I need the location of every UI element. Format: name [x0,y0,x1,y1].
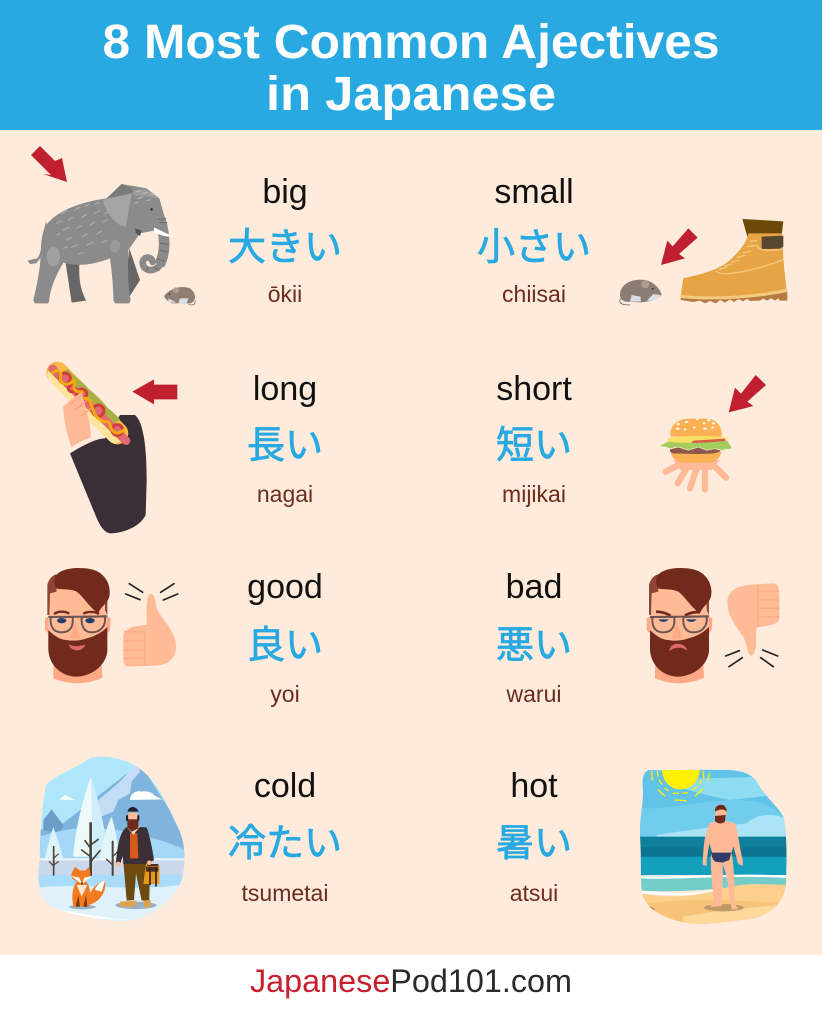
label: long: 長い [247,425,323,467]
label: small: small [494,173,574,211]
label: big: 大きい [228,227,342,269]
title: in Japanese [266,68,556,121]
label: small: 小さい [477,227,591,269]
icon: mouse and boot [620,219,787,305]
label: good [247,568,323,707]
label: cold: tsumetai [242,880,328,906]
icon: thumbs up with rays [123,584,178,667]
icon: happy bearded man [45,568,111,683]
label: hot: atsui [510,880,558,906]
label: cold: 冷たい [228,823,342,865]
label: big: ōkii [268,281,302,307]
label: long [247,370,323,507]
label: short: 短い [496,425,572,467]
label: cold: cold [254,767,316,805]
label: short: mijikai [502,481,566,507]
icon: elephant and mouse [27,184,195,305]
title [102,16,720,121]
icon: beach scene with man and sun [640,770,786,924]
mouse [164,287,195,305]
label: big: big [262,173,308,211]
title: 8 Most Common Ajectives [102,16,720,69]
label: hot [496,767,572,906]
label: bad: warui [506,681,561,707]
label: bad [496,568,572,707]
label: cold [228,767,342,906]
icon: hot dog in hand [52,369,147,533]
label: good: good [247,568,323,606]
label: hot: 暑い [496,823,572,865]
website logo text: JapanesePod101.com [250,963,572,999]
label: good: yoi [270,681,300,707]
arrow: pointing at elephant [31,146,67,182]
icon: thumbs down with rays [726,583,779,667]
arrow: pointing at hot dog [132,379,177,404]
label: bad: bad [506,568,562,606]
arrow: pointing at mouse [661,228,698,265]
header banner [0,0,822,130]
label: big [228,173,342,307]
fox [71,867,105,907]
label: long: long [253,370,317,408]
label: small [477,173,591,307]
label: short [496,370,572,507]
icon: winter scene with man and fox [38,756,184,921]
label: small: chiisai [502,281,566,307]
footer [0,955,822,1022]
label: long: nagai [257,481,313,507]
label: bad: 悪い [496,625,572,667]
label: short: short [496,370,572,408]
label: good: 良い [247,625,323,667]
label: hot: hot [510,767,558,805]
man [116,807,159,907]
icon: unhappy bearded man [647,568,712,683]
icon: burger on hand [660,418,732,489]
arrow: pointing at burger [729,375,766,412]
